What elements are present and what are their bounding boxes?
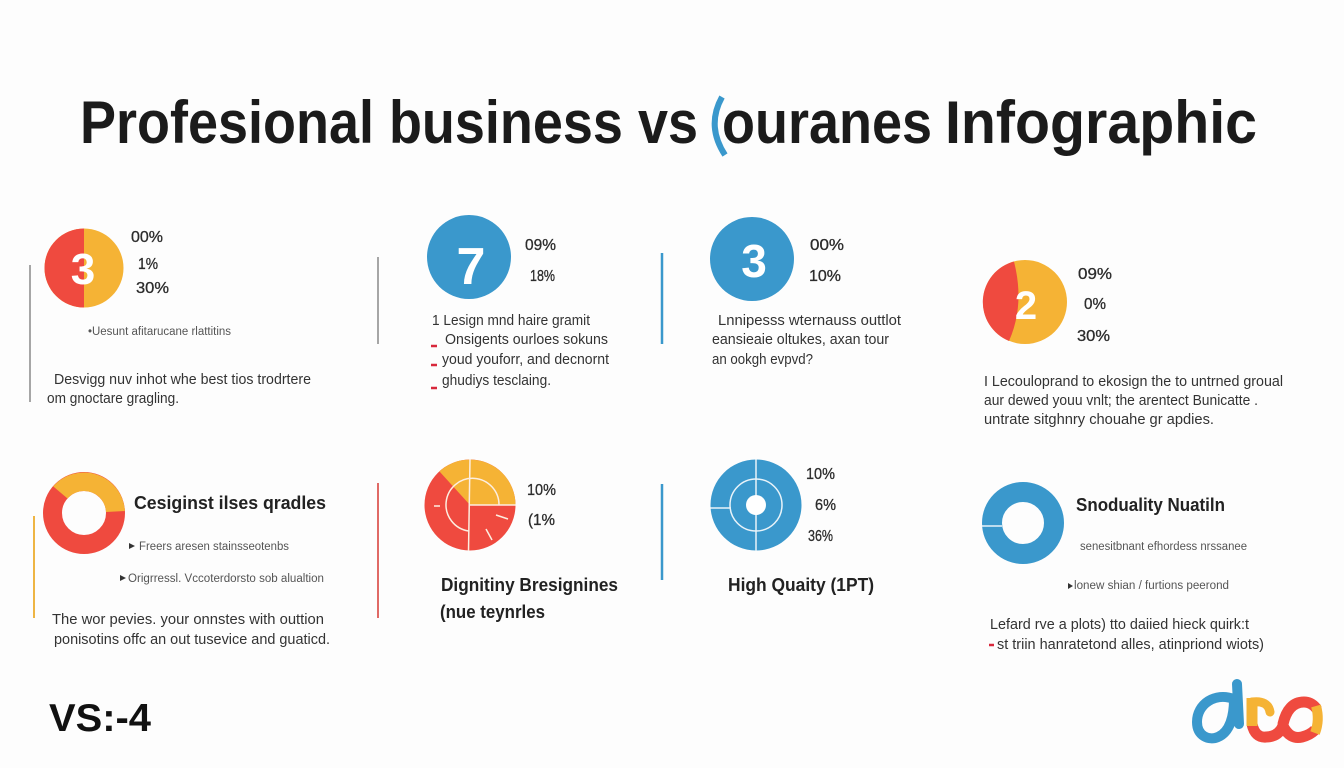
body text: The wor pevies. your onnstes with outtion — [52, 612, 324, 628]
icon: red and orange circle with 2: 2 — [1015, 284, 1037, 328]
version label: VS:-4 — [49, 697, 151, 740]
percent labels — [1077, 266, 1112, 345]
percent labels: 00% — [810, 237, 844, 254]
bullet list — [431, 313, 609, 389]
heading: Cesiginst ilses qradles — [134, 493, 326, 513]
percent labels: 30% — [1077, 328, 1110, 345]
body text — [47, 372, 311, 407]
target chart — [710, 460, 802, 551]
body text: om gnoctare gragling. — [47, 391, 179, 407]
panel: bottom right donut — [982, 492, 1264, 653]
percent labels: 36% — [808, 528, 833, 545]
bullet list: ghudiys tesclaing. — [442, 373, 551, 389]
panel: top right number 2 — [983, 260, 1283, 428]
body text — [52, 612, 330, 648]
body text: Desvigg nuv inhot whe best tios trodrtere — [54, 372, 311, 388]
percent labels: (1% — [528, 512, 555, 529]
panel: top left number 3 — [30, 228, 378, 407]
divider: blue — [661, 253, 663, 344]
icon: red and orange circle with 3 — [44, 228, 124, 308]
panel: bottom pie red — [424, 460, 618, 622]
percent labels: 10% — [806, 466, 835, 483]
percent labels: 00% — [131, 229, 163, 246]
body text: I Lecouloprand to ekosign the to untrned groual — [984, 374, 1283, 390]
pie chart with white lines — [424, 460, 516, 551]
bullet notes: senesitbnant efhordess nrssanee — [1080, 541, 1247, 553]
percent labels: 6% — [815, 497, 836, 514]
bullet notes: Freers aresen stainsseotenbs — [139, 541, 289, 553]
percent labels — [131, 229, 169, 297]
icon: blue circle with 7: 7 — [457, 238, 485, 296]
percent labels — [806, 466, 836, 545]
panel: top number 7 — [427, 215, 609, 389]
body text: untrate sitghnry chouahe gr apdies. — [984, 412, 1214, 428]
icon: blue circle with 3: 3 — [741, 235, 767, 287]
percent labels — [525, 237, 556, 285]
percent labels: 10% — [809, 268, 841, 285]
heading: Snoduality Nuatiln — [1076, 495, 1225, 515]
bullet list: youd youforr, and decnornt — [442, 352, 609, 368]
small note: •Uesunt afitarucane rlattitins — [88, 326, 231, 338]
icon: blue circle with 7 — [427, 215, 511, 299]
title — [80, 89, 1257, 156]
percent labels: 18% — [530, 268, 555, 285]
body text — [984, 374, 1283, 428]
title: ouranes — [722, 89, 932, 156]
icon: red and orange circle with 3: 3 — [71, 245, 95, 294]
heading — [440, 575, 618, 622]
body text — [989, 617, 1264, 653]
body text: aur dewed youu vnlt; the arentect Bunicatte . — [984, 393, 1258, 409]
title: Profesional business vs — [80, 89, 698, 156]
donut chart: orange and red — [52, 472, 125, 544]
icon: colorful logo — [1197, 684, 1318, 738]
percent labels: 09% — [525, 237, 556, 254]
heading: High Quaity (1PT) — [728, 575, 874, 595]
bullet notes — [1068, 541, 1247, 592]
icon: blue circle with 3 — [710, 217, 794, 301]
percent labels: 09% — [1078, 266, 1112, 283]
panel: top number 3 blue — [710, 217, 901, 368]
bullet list: Onsigents ourloes sokuns — [445, 332, 608, 348]
body text: st triin hanratetond alles, atinpriond wiots) — [997, 637, 1264, 653]
title: Infographic — [945, 89, 1257, 156]
percent labels: 30% — [136, 280, 169, 297]
icon: red and orange circle with 2 — [983, 260, 1067, 344]
bullet notes: Origrressl. Vccoterdorsto sob alualtion — [128, 573, 324, 585]
percent labels: 10% — [527, 482, 556, 499]
divider: blue — [661, 484, 663, 580]
percent labels — [809, 237, 844, 285]
panel: bottom blue target — [710, 460, 874, 595]
body text: eansieaie oltukes, axan tour — [712, 332, 889, 348]
percent labels: 0% — [1084, 296, 1106, 313]
body text: Lefard rve a plots) tto daiied hieck quirk:t — [990, 617, 1249, 633]
percent labels: 1% — [138, 256, 158, 273]
body text: ponisotins offc an out tusevice and guaticd. — [54, 632, 330, 648]
donut chart: blue — [982, 492, 1054, 554]
bullet notes — [120, 541, 324, 585]
bullet notes: lonew shian / furtions peerond — [1074, 580, 1229, 592]
bullet list: 1 Lesign mnd haire gramit — [432, 313, 590, 329]
body text — [712, 313, 901, 368]
body text: an ookgh evpvd? — [712, 352, 813, 368]
body text: Lnnipesss wternauss outtlot — [718, 313, 901, 329]
percent labels — [527, 482, 556, 529]
panel: bottom left donut — [34, 472, 378, 648]
heading: Dignitiny Bresignines — [441, 575, 618, 595]
heading: (nue teynrles — [440, 602, 545, 622]
